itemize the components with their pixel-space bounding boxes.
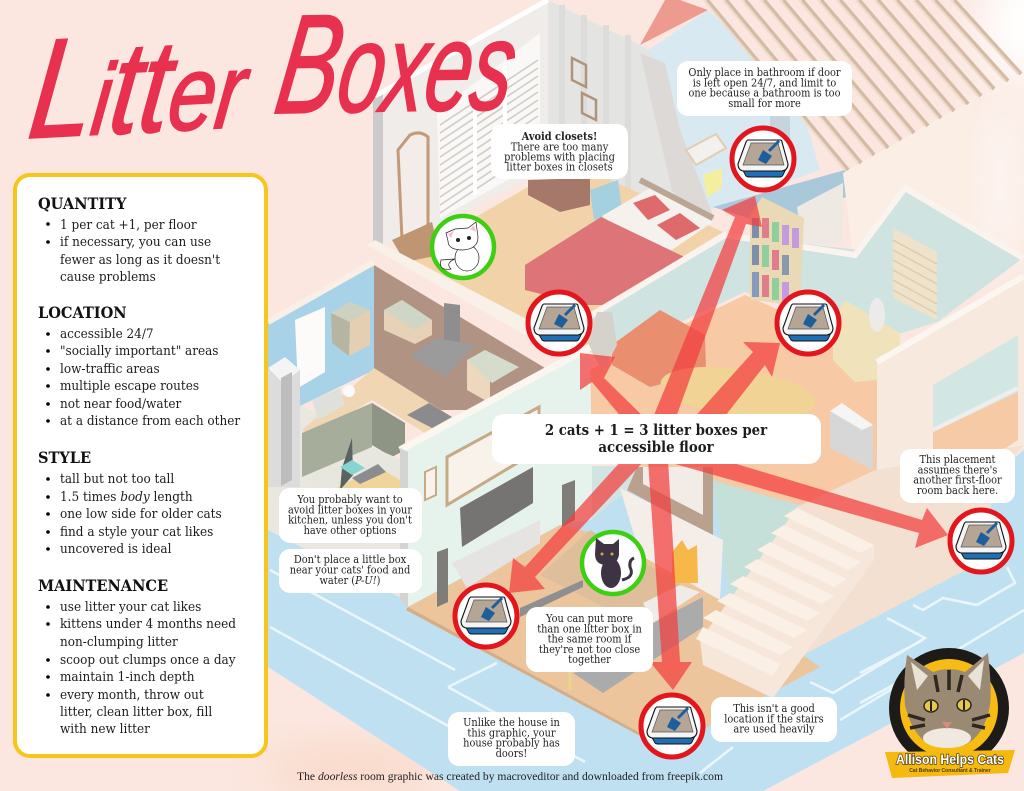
callout: doors: doors! (496, 747, 527, 760)
arrow to stair box (648, 460, 692, 690)
callout: closets: litter boxes in closets (506, 161, 613, 174)
section: style: find a style your cat likes (60, 525, 213, 540)
arrow to TV room box (509, 460, 645, 593)
section: style (38, 448, 222, 557)
callout: same room: than one litter box in (537, 622, 642, 635)
callout: closets: problems with placing (504, 150, 615, 164)
callout: bathroom (677, 61, 852, 116)
callout: first-floor room: room back here. (917, 484, 998, 497)
callout: doors: Unlike the house in (463, 716, 561, 729)
section: style: tall but not too tall (60, 472, 174, 487)
lower living room (400, 347, 820, 751)
staircase (696, 445, 1024, 698)
litter box marker: bathroom (732, 128, 794, 190)
callout: doors (448, 712, 575, 766)
section: style: 1.5 times body length (60, 490, 193, 505)
kitchen (268, 265, 545, 600)
callout: bathroom: small for more (728, 97, 801, 110)
callout: stairs: are used heavily (733, 722, 815, 736)
section: location: not near food/water (60, 397, 182, 412)
callout: doors: house probably has (463, 736, 560, 750)
callout: kitchen: You probably want to (296, 493, 403, 506)
callout: bathroom: one because a bathroom is too (689, 86, 841, 100)
callout: first-floor room (900, 449, 1015, 503)
callout: kitchen: kitchen, unless you don't (288, 514, 412, 526)
arrow to back room box (668, 462, 948, 548)
section: location: low-traffic areas (60, 362, 160, 377)
section: location: multiple escape routes (60, 379, 199, 394)
bedroom walls (373, 0, 680, 248)
section: location: LOCATION (38, 303, 127, 322)
section: style: STYLE (38, 448, 91, 467)
section: quantity: fewer as long as it doesn't (60, 253, 220, 268)
callout: same room: together (568, 653, 611, 666)
section: maintenance: with new litter (60, 722, 150, 737)
roof and bathroom (640, 0, 850, 245)
front wall with window (877, 273, 1024, 555)
central label: 2 cats + 1 = 3 litter boxes per (545, 422, 768, 439)
section: style: one low side for older cats (60, 507, 222, 522)
living room upper floor (570, 188, 1024, 555)
section: maintenance: use litter your cat likes (60, 600, 201, 615)
callout: closets (491, 124, 628, 179)
callout: closets: There are too many (511, 140, 609, 153)
section: quantity: 1 per cat +1, per floor (60, 218, 197, 233)
callout: food and water: Don't place a little box (294, 553, 407, 566)
section: maintenance: scoop out clumps once a day (60, 653, 236, 668)
callout: same room (526, 607, 653, 672)
callout: same room: You can put more (545, 612, 633, 625)
litter box marker: TV room (455, 585, 517, 647)
callout: kitchen: avoid litter boxes in your (288, 503, 412, 516)
black cat in green circle (582, 532, 644, 594)
white cat in green circle (432, 216, 494, 278)
arrow to bedroom-wall box (580, 353, 652, 425)
logo: Allison Helps Cats (885, 648, 1015, 778)
section: location: "socially important" areas (60, 344, 218, 359)
arrows from central label (509, 196, 948, 690)
section: maintenance (38, 576, 236, 737)
section: location (38, 303, 240, 429)
callout: closets: Avoid closets! (521, 130, 597, 143)
callout: first-floor room: This placement (920, 453, 996, 466)
callout: doors: this graphic, your (467, 726, 556, 739)
logo: Allison Helps Cats: Allison Helps Cats (896, 751, 1004, 767)
bedroom floor, bed and furniture (392, 133, 723, 362)
central label: accessible floor (598, 439, 715, 456)
callout: stairs: location if the stairs (724, 712, 824, 725)
title (22, 0, 528, 169)
roof rafters (704, 0, 1021, 170)
section: maintenance: litter, clean litter box, fill (60, 705, 212, 720)
litter box marker: back room (950, 510, 1012, 572)
section: maintenance: every month, throw out (60, 688, 204, 703)
callout: kitchen: have other options (304, 524, 396, 537)
callout: bathroom: is left open 24/7, and limit to (693, 76, 836, 89)
footer credit: The doorless room graphic was created by macroveditor and downloaded from freepik.com (297, 770, 723, 783)
section: maintenance: non-clumping litter (60, 635, 178, 650)
callout: food and water (279, 549, 422, 593)
callout: same room: they're not too close (539, 643, 640, 656)
central label (492, 414, 821, 464)
callout: food and water: near your cats' food and (290, 563, 410, 576)
section: location: accessible 24/7 (60, 327, 154, 342)
section: quantity (38, 194, 220, 285)
callout: kitchen (279, 488, 422, 543)
kitchen top wall edges (268, 262, 374, 322)
logo: Allison Helps Cats: Cat Behavior Consultant & Trainer (909, 768, 991, 774)
section: maintenance: MAINTENANCE (38, 576, 168, 595)
ground: blue yard (268, 440, 1024, 791)
callout: same room: the same room if (548, 632, 633, 646)
callout: bathroom: Only place in bathroom if door (688, 66, 841, 79)
arrow to bathroom box (652, 196, 762, 420)
section: maintenance: maintain 1-inch depth (60, 670, 195, 685)
section: maintenance: kittens under 4 months need (60, 617, 236, 632)
callout: food and water: water (P-U!) (320, 574, 381, 587)
arrow to right upstairs box (692, 342, 780, 420)
callout: stairs: This isn't a good (733, 702, 815, 715)
title: Litter (22, 0, 260, 169)
upper right cream wall (843, 100, 972, 257)
section: quantity: cause problems (60, 270, 156, 285)
litter box marker: below stairs (641, 695, 703, 757)
illustration: isometric house (268, 0, 1024, 791)
panel: advice sidebar (15, 175, 266, 756)
callout: first-floor room: assumes there's (918, 463, 997, 476)
callout: first-floor room: another first-floor (913, 474, 1002, 486)
litter box marker: living room upstairs (777, 292, 839, 354)
callout: stairs (711, 697, 837, 742)
bookshelf (750, 197, 804, 305)
section: quantity: if necessary, you can use (60, 235, 211, 250)
litter box marker: bedroom (528, 292, 590, 354)
section: location: at a distance from each other (60, 414, 240, 429)
section: quantity: QUANTITY (38, 194, 127, 213)
upper floor wall divider (367, 240, 605, 372)
section: style: uncovered is ideal (60, 542, 172, 557)
